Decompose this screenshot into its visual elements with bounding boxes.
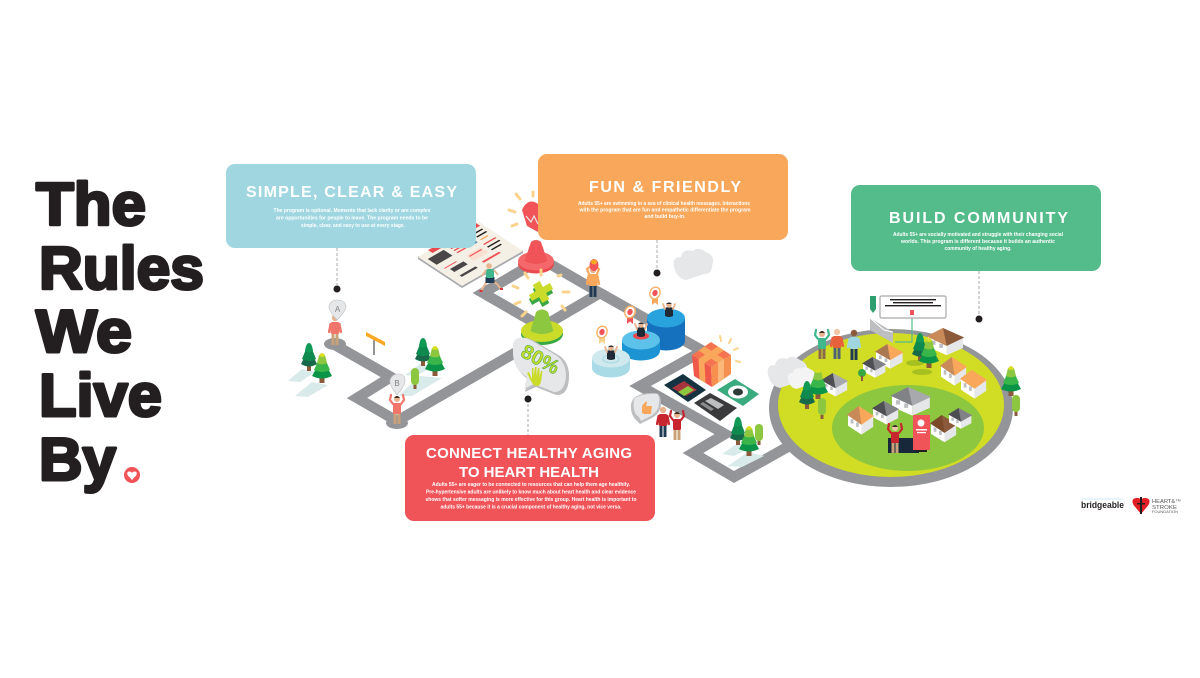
- cylinder: light blue step: [592, 324, 630, 378]
- text: fun body: [578, 201, 751, 220]
- icon: red cone: [518, 240, 554, 274]
- heading: fun friendly: FUN & FRIENDLY: [589, 179, 741, 196]
- community: ring and lawn: [769, 329, 1013, 487]
- heading: connect healthy aging to heart health: [426, 445, 632, 481]
- panel: fun and friendly: [538, 154, 788, 240]
- heading: connect healthy aging to heart health: TO HEART HEALTH: [459, 464, 599, 481]
- text: simple body: The program is optional. Moments that lack clarity or are complex: [274, 208, 431, 214]
- text: connect body: shows that softer messaging is more effective for this group. Heart health is important to: [426, 497, 636, 503]
- trees: start grove: [288, 343, 332, 397]
- icon: heart dot: [124, 467, 140, 483]
- logo: bridgeable: bridgeable: [1081, 500, 1124, 511]
- pin: A: [329, 300, 346, 320]
- cylinder: dark blue step: [647, 285, 685, 350]
- text: fun body: with the program that are fun and empathetic differentiate the program: [578, 208, 751, 214]
- houses: community neighbourhood: [821, 328, 987, 442]
- icon: green marker: [870, 296, 876, 313]
- card: green badge card: [717, 379, 759, 406]
- banner: heart booth with host: [888, 415, 930, 453]
- people: two staff: [657, 407, 684, 440]
- text: connect body: Pre-hypertensive adults are unlikely to know much about heart health and clear evidence: [426, 490, 636, 496]
- title: The Rules We Live By: Live: [39, 362, 162, 429]
- callout dot: simple: [334, 248, 340, 292]
- person: at B: [390, 395, 404, 424]
- bubble: thumbs up: [631, 393, 661, 424]
- title: The Rules We Live By: Rules: [39, 235, 204, 302]
- title: The Rules We Live By: The: [36, 171, 146, 238]
- heading: simple clear easy: SIMPLE, CLEAR & EASY: [246, 184, 457, 201]
- title: The Rules We Live By: We: [36, 298, 132, 365]
- panel: build community: [851, 185, 1101, 271]
- heading: connect healthy aging to heart health: CONNECT HEALTHY AGING: [426, 445, 632, 462]
- icon: envelope with connector: [870, 318, 912, 343]
- text: community body: [893, 232, 1064, 252]
- icon: green plus with rays: [513, 270, 569, 316]
- icon: cloud grey: [674, 249, 713, 280]
- person: runner: [480, 263, 503, 292]
- text: connect body: Adults 55+ are eager to be connected to resources that can help them age healthily.: [432, 482, 631, 488]
- text: fun body: and build buy-in.: [644, 214, 686, 220]
- text: community body: community of healthy aging.: [944, 246, 1012, 252]
- road: journey path: [324, 256, 800, 477]
- icon: gift box: [692, 336, 740, 387]
- text: simple body: simple, clear, and easy to use at every stage.: [301, 223, 406, 229]
- person: at A: [329, 315, 341, 345]
- logo: heart and stroke foundation: [1132, 497, 1181, 514]
- logo: heart and stroke foundation: HEART&™: [1152, 499, 1181, 505]
- people: three seniors: [815, 329, 860, 360]
- text: simple body: [274, 208, 431, 229]
- panel: connect healthy aging: [405, 435, 655, 521]
- person: holding heart: [587, 259, 599, 297]
- text: connect body: adults 55+ because it is a crucial component of healthy aging, not vice versa.: [440, 504, 622, 510]
- title: The Rules We Live By: By: [39, 426, 117, 493]
- heading: build community: BUILD COMMUNITY: [889, 210, 1068, 227]
- trees: lower grove: [722, 417, 764, 467]
- trees: grove near B: [398, 338, 445, 396]
- bubble: 80 percent: 80%: [517, 341, 563, 379]
- text: fun body: Adults 55+ are swimming in a sea of clinical health messages. Interactions: [578, 201, 750, 207]
- speech box: social post: [880, 296, 946, 318]
- text: simple body: are opportunities for people to leave. The program needs to be: [276, 216, 428, 222]
- title: The Rules We Live By: [36, 171, 204, 493]
- icon: cloud by ring: [768, 357, 815, 389]
- sign: orange direction post: [366, 332, 385, 355]
- logo: heart and stroke foundation: FOUNDATION: [1152, 510, 1179, 514]
- logo: heart and stroke foundation: STROKE: [1152, 505, 1177, 511]
- callout dot: connect: [524, 396, 532, 435]
- card: dark food card: [664, 374, 706, 402]
- icon: red heartbeat tag with rays: [509, 192, 538, 232]
- panel: simple clear and easy: [226, 164, 476, 248]
- bubble: 80 percent: [513, 338, 569, 395]
- trees: community: [799, 333, 1021, 419]
- icon: green cone: [521, 310, 563, 345]
- text: community body: worlds. This program is different because it builds an authentic: [900, 239, 1055, 245]
- cylinder: mid blue step: [622, 304, 660, 360]
- pin: B: B: [394, 379, 400, 388]
- callout dot: fun: [654, 240, 660, 276]
- pin: A: A: [335, 305, 341, 314]
- pin: B: [390, 374, 405, 395]
- text: community body: Adults 55+ are socially motivated and struggle with their changing social: [893, 232, 1064, 238]
- callout dot: community: [976, 271, 982, 322]
- card: grey text card: [694, 393, 737, 421]
- document: health leaflet: [417, 221, 523, 288]
- text: connect body: [426, 482, 636, 510]
